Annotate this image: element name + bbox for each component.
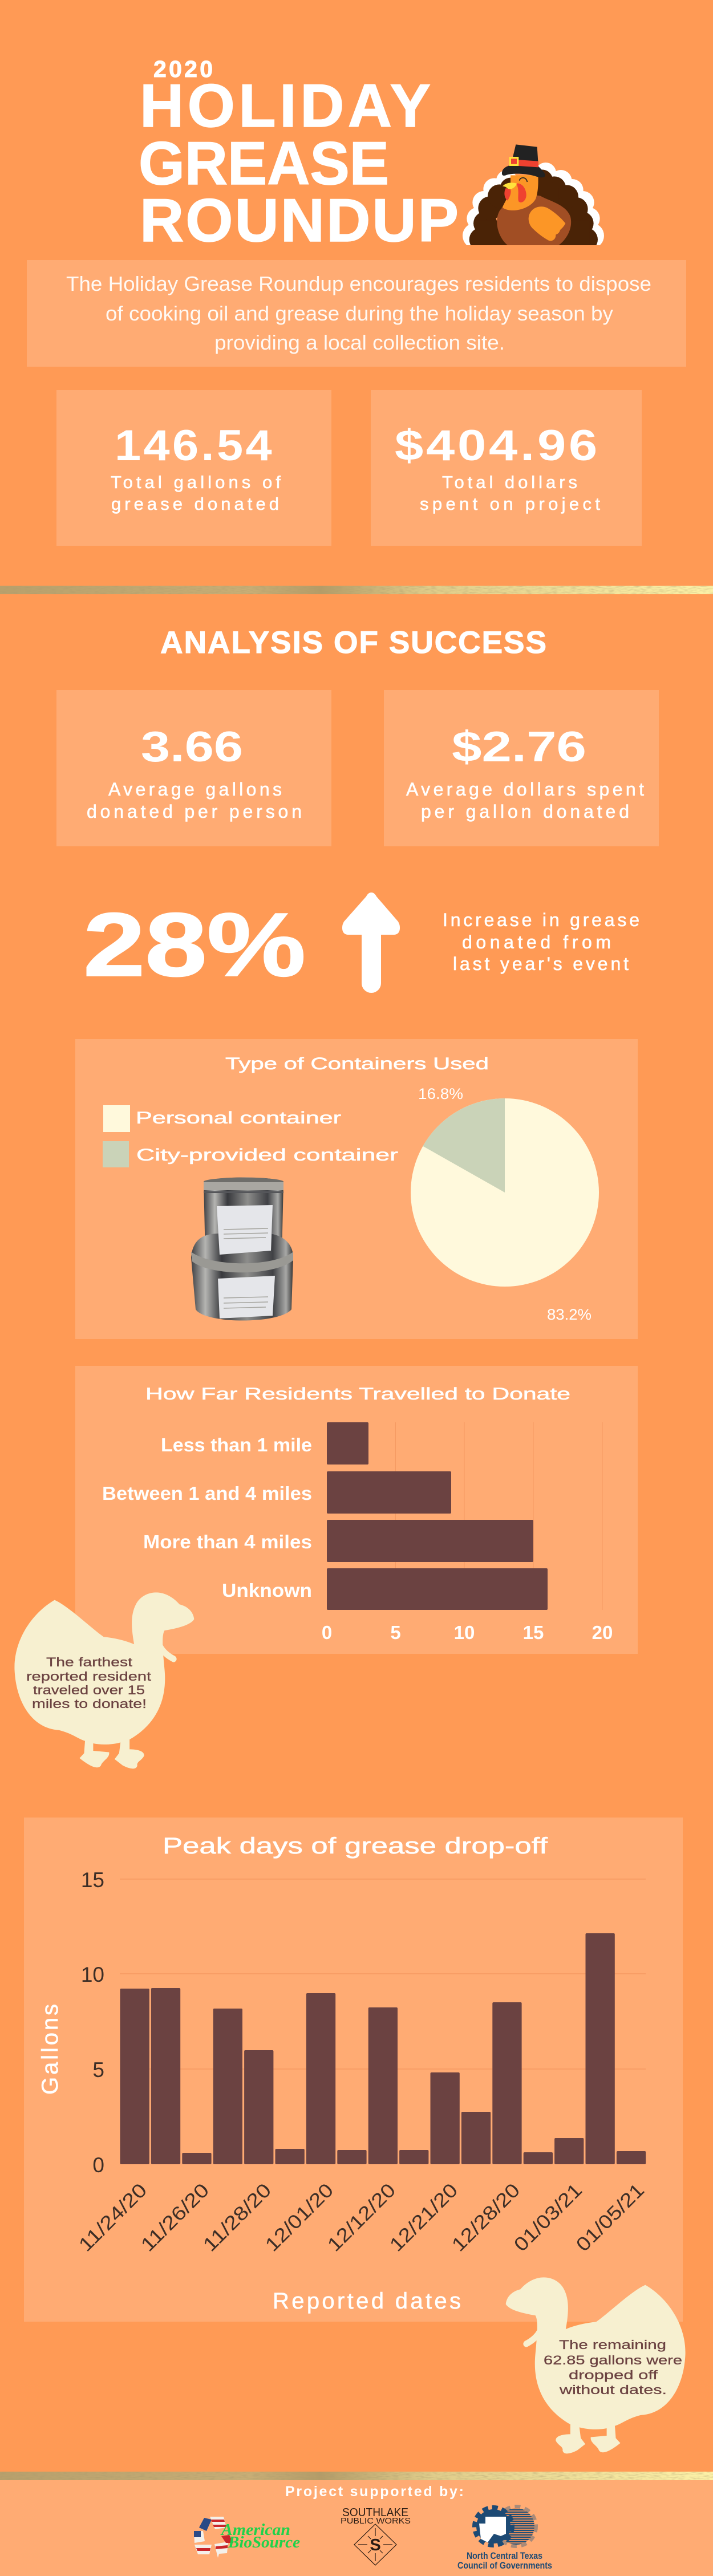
logo: Southlake Public Works: S: [370, 2536, 381, 2554]
bar chart: distance: More than 4 miles: [143, 1531, 312, 1552]
logo: Southlake Public Works: PUBLIC WORKS: [341, 2516, 411, 2526]
column chart: gallons by date: [75, 1868, 649, 2256]
panel: total gallons: 146.54: [115, 421, 274, 470]
panel: average gallons: 3.66: [141, 723, 243, 770]
logo: Southlake Public Works: SOUTHLAKE: [342, 2506, 408, 2519]
bar chart: distance: [102, 1422, 613, 1643]
panel: total dollars: spent on project: [420, 494, 600, 514]
column chart: gallons by date: 0: [92, 2153, 104, 2177]
callout: turkey, undated gallons: without dates.: [559, 2383, 667, 2397]
big number: 28 percent: 28%: [83, 895, 306, 995]
bar chart: distance: Less than 1 mile: [161, 1434, 312, 1455]
text: increase description: last year's event: [453, 954, 629, 974]
panel: type of containers used: [75, 1039, 638, 1339]
column chart: gallons by date: 12/01/20: [261, 2179, 338, 2256]
legend: [103, 1105, 398, 1167]
chart title: How Far Residents Travelled to Donate: [145, 1385, 570, 1403]
logo: North Central Texas Council of Governments: [457, 2506, 552, 2571]
pie chart: [411, 1085, 599, 1323]
legend: City-provided container: [136, 1146, 398, 1165]
panel: peak days of grease drop-off: [24, 1818, 683, 2322]
x axis title: Reported dates: [273, 2289, 461, 2314]
panel: intro text: The Holiday Grease Roundup encourages residents to dispose: [66, 272, 651, 295]
title: GREASE: [139, 129, 389, 197]
bar chart: distance: Between 1 and 4 miles: [102, 1483, 312, 1504]
logo: American BioSource: [194, 2517, 300, 2558]
pie chart: 16.8%: [418, 1085, 463, 1102]
panel: average gallons: [56, 690, 331, 846]
panel: total dollars: Total dollars: [442, 472, 577, 492]
chart title: Type of Containers Used: [225, 1054, 489, 1073]
title: [139, 56, 459, 254]
panel: total dollars: [371, 390, 642, 546]
column chart: gallons by date: 5: [92, 2058, 104, 2082]
logo: North Central Texas Council of Governments: North Central Texas: [467, 2550, 542, 2561]
panel: total gallons: grease donated: [111, 494, 279, 514]
logo: American BioSource: American: [220, 2521, 290, 2539]
panel: intro text: of cooking oil and grease during the holiday season by: [106, 302, 613, 325]
pie chart: 83.2%: [547, 1306, 592, 1323]
logo: Southlake Public Works: [341, 2506, 411, 2565]
callout: turkey, undated gallons: [506, 2277, 686, 2453]
chart title: Peak days of grease drop-off: [163, 1833, 548, 1859]
logo: American BioSource: BioSource: [228, 2534, 300, 2551]
bar chart: distance: 5: [390, 1622, 401, 1643]
panel: intro text: providing a local collection site.: [214, 331, 505, 354]
text: increase description: Increase in grease: [443, 910, 639, 930]
arrow: up: [342, 893, 400, 993]
panel: average dollars: per gallon donated: [421, 801, 629, 822]
bar chart: distance: 10: [454, 1622, 475, 1643]
bar chart: distance: 20: [592, 1622, 613, 1643]
callout: turkey, undated gallons: 62.85 gallons were: [544, 2353, 682, 2367]
column chart: gallons by date: 12/21/20: [386, 2179, 462, 2256]
column chart: gallons by date: 11/28/20: [199, 2179, 276, 2256]
bar chart: distance: 15: [523, 1622, 544, 1643]
panel: intro text: [27, 260, 686, 367]
text: increase description: donated from: [462, 932, 611, 952]
callout: turkey, farthest resident: The farthest: [46, 1655, 132, 1669]
callout: turkey, undated gallons: dropped off: [569, 2368, 658, 2382]
icon: turkey with pilgrim hat: [463, 144, 604, 251]
logo: North Central Texas Council of Governments: Council of Governments: [457, 2560, 552, 2571]
panel: total gallons: Total gallons of: [111, 472, 281, 492]
callout: turkey, undated gallons: The remaining: [559, 2338, 666, 2352]
panel: total dollars: $404.96: [395, 421, 600, 470]
panel: average dollars: [384, 690, 659, 846]
bar chart: distance: Unknown: [222, 1580, 312, 1601]
column chart: gallons by date: 01/03/21: [510, 2179, 586, 2256]
heading: analysis of success: ANALYSIS OF SUCCESS: [160, 624, 546, 660]
column chart: gallons by date: 12/12/20: [323, 2179, 400, 2256]
column chart: gallons by date: 01/05/21: [572, 2179, 649, 2256]
column chart: gallons by date: 10: [81, 1963, 104, 1986]
panel: average dollars: Average dollars spent: [406, 779, 644, 800]
image: stacked steel containers: [191, 1177, 293, 1321]
panel: average gallons: donated per person: [87, 801, 302, 822]
callout: turkey, farthest resident: traveled over 15: [33, 1683, 145, 1697]
callout: turkey, farthest resident: miles to donate!: [32, 1697, 147, 1711]
y axis title: Gallons: [38, 2004, 63, 2095]
panel: total gallons: [56, 390, 331, 546]
panel: footer supporters: [0, 2472, 713, 2576]
column chart: gallons by date: 12/28/20: [448, 2179, 524, 2256]
callout: turkey, farthest resident: [14, 1592, 194, 1768]
column chart: gallons by date: 11/26/20: [137, 2179, 213, 2256]
column chart: gallons by date: 11/24/20: [75, 2179, 151, 2256]
legend: Personal container: [136, 1109, 341, 1127]
column chart: gallons by date: 15: [81, 1868, 104, 1892]
panel: average dollars: $2.76: [452, 723, 586, 770]
panel: average gallons: Average gallons: [108, 779, 282, 800]
panel: how far residents travelled: [75, 1366, 638, 1654]
title: HOLIDAY: [140, 71, 431, 140]
footer heading: Project supported by:: [285, 2484, 464, 2500]
callout: turkey, farthest resident: reported resident: [26, 1669, 151, 1683]
title: ROUNDUP: [140, 186, 459, 254]
text: increase description: [443, 910, 639, 974]
title: 2020: [153, 56, 213, 82]
bar chart: distance: 0: [322, 1622, 332, 1643]
